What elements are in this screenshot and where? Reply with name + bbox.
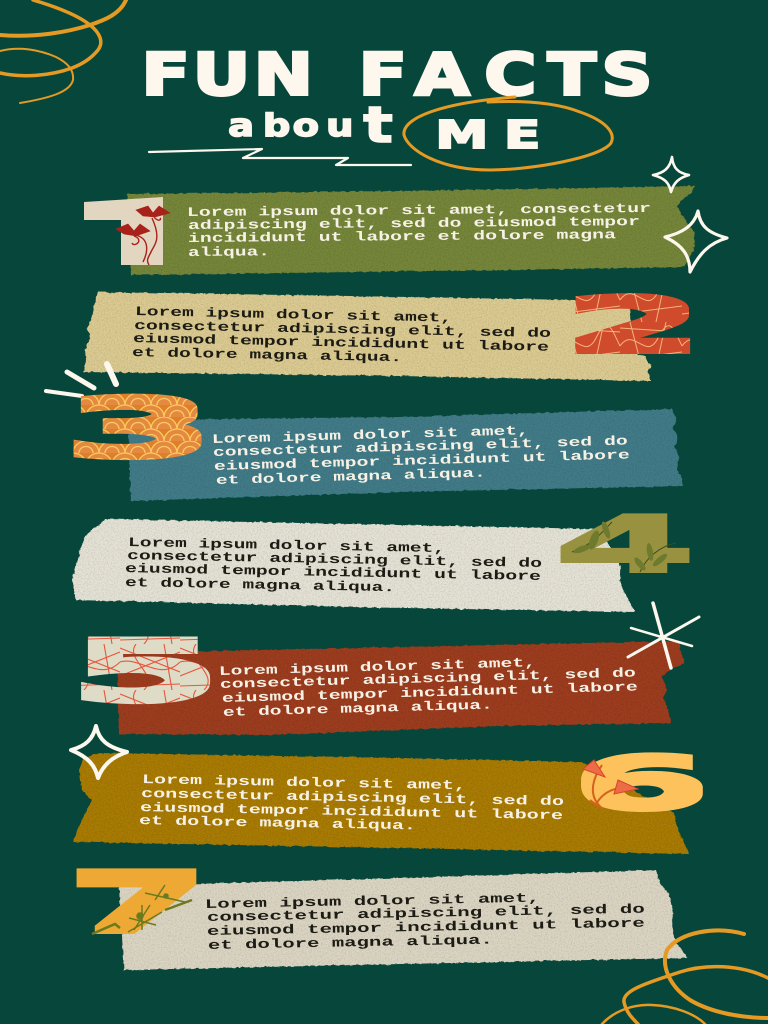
number 5 — [81, 636, 210, 704]
fact text: Lorem ipsum dolor sit amet, — [142, 772, 466, 793]
fact text: eiusmod tempor incididunt ut labore — [125, 561, 541, 584]
fact text: consectetur adipiscing elit, sed do — [213, 433, 628, 460]
fact text: consectetur adipiscing elit, sed do — [134, 318, 551, 341]
fact text — [187, 201, 651, 260]
fact text: et dolore magna aliqua. — [208, 933, 493, 953]
fact text: incididunt ut labore et dolore magna — [188, 227, 616, 246]
white paper strip — [72, 519, 635, 612]
number 3 — [74, 394, 202, 460]
fact text: eiusmod tempor incididunt ut labore — [207, 916, 645, 939]
cream paper strip — [83, 292, 651, 381]
fact text: Lorem ipsum dolor sit amet, — [219, 655, 536, 679]
icon: leaves — [572, 521, 676, 572]
number 4: 4 — [551, 501, 699, 588]
fact text: et dolore magna aliqua. — [139, 813, 416, 833]
fact text: consectetur adipiscing elit, sed do — [207, 902, 645, 925]
fact text: consectetur adipiscing elit, sed do — [141, 786, 564, 809]
fact text — [205, 891, 645, 953]
number 2 — [575, 293, 690, 354]
panel: fact 2 — [83, 285, 700, 381]
grey paper strip — [119, 870, 688, 970]
sparkle: asterisk — [628, 603, 699, 668]
fact text: consectetur adipiscing elit, sed do — [220, 665, 636, 692]
fact text — [219, 655, 638, 720]
ochre paper strip — [73, 753, 689, 854]
circle around Me — [404, 97, 612, 170]
zigzag underline — [149, 149, 411, 165]
sparkle: diamond — [71, 726, 127, 778]
number 7: 7 — [62, 857, 214, 949]
fact text: consectetur adipiscing elit, sed do — [127, 548, 542, 571]
rust paper strip — [117, 641, 685, 735]
panel: fact 6 — [73, 742, 714, 854]
subtitle: about: t — [363, 97, 393, 154]
number 1: 1 — [62, 178, 215, 308]
title: Me: ME — [435, 113, 540, 157]
fact text: Lorem ipsum dolor sit amet, consectetur — [187, 201, 651, 220]
number 1 — [84, 197, 163, 265]
panel: fact 3 — [60, 385, 683, 501]
fact text: eiusmod tempor incididunt ut labore — [133, 331, 549, 355]
panel: fact 7 — [62, 857, 688, 970]
fact text — [139, 772, 564, 833]
fact text: et dolore magna aliqua. — [132, 345, 402, 365]
number 6: 6 — [568, 742, 714, 825]
decorative swirl: top left — [0, 0, 126, 103]
fact text: Lorem ipsum dolor sit amet, — [212, 423, 529, 447]
panel: fact 4 — [72, 501, 699, 612]
fact text: Lorem ipsum dolor sit amet, — [135, 304, 452, 326]
burst marks near 3 — [46, 364, 116, 396]
panel: fact 1 — [84, 185, 695, 276]
fact text: eiusmod tempor incididunt ut labore — [140, 800, 563, 823]
icon: mushrooms — [583, 760, 638, 809]
fact text: et dolore magna aliqua. — [216, 465, 486, 488]
panel: fact 5 — [70, 628, 685, 735]
fact text — [132, 304, 551, 365]
decorative swirl: bottom right — [602, 931, 768, 1024]
fact text — [125, 535, 542, 595]
title: Fun Facts: FUN FACTS — [142, 42, 652, 109]
sparkle: small — [653, 157, 689, 192]
fact text: adipiscing elit, sed do eiusmod tempor — [188, 214, 640, 233]
olive paper strip — [127, 186, 695, 275]
fact text: eiusmod tempor incididunt ut labore — [214, 447, 630, 474]
fact text: et dolore magna aliqua. — [125, 575, 395, 595]
subtitle: about: abou — [228, 108, 353, 144]
fact text: eiusmod tempor incididunt ut labore — [222, 679, 638, 706]
icon: green flowers — [92, 885, 192, 934]
fact text — [212, 423, 630, 488]
fact text: et dolore magna aliqua. — [223, 697, 493, 720]
sparkle: large — [665, 211, 727, 272]
fact text: Lorem ipsum dolor sit amet, — [128, 535, 445, 556]
fact text: Lorem ipsum dolor sit amet, — [205, 891, 540, 912]
icon: red flowers — [116, 206, 170, 265]
fact text: aliqua. — [188, 244, 270, 260]
blue paper strip — [128, 409, 683, 501]
